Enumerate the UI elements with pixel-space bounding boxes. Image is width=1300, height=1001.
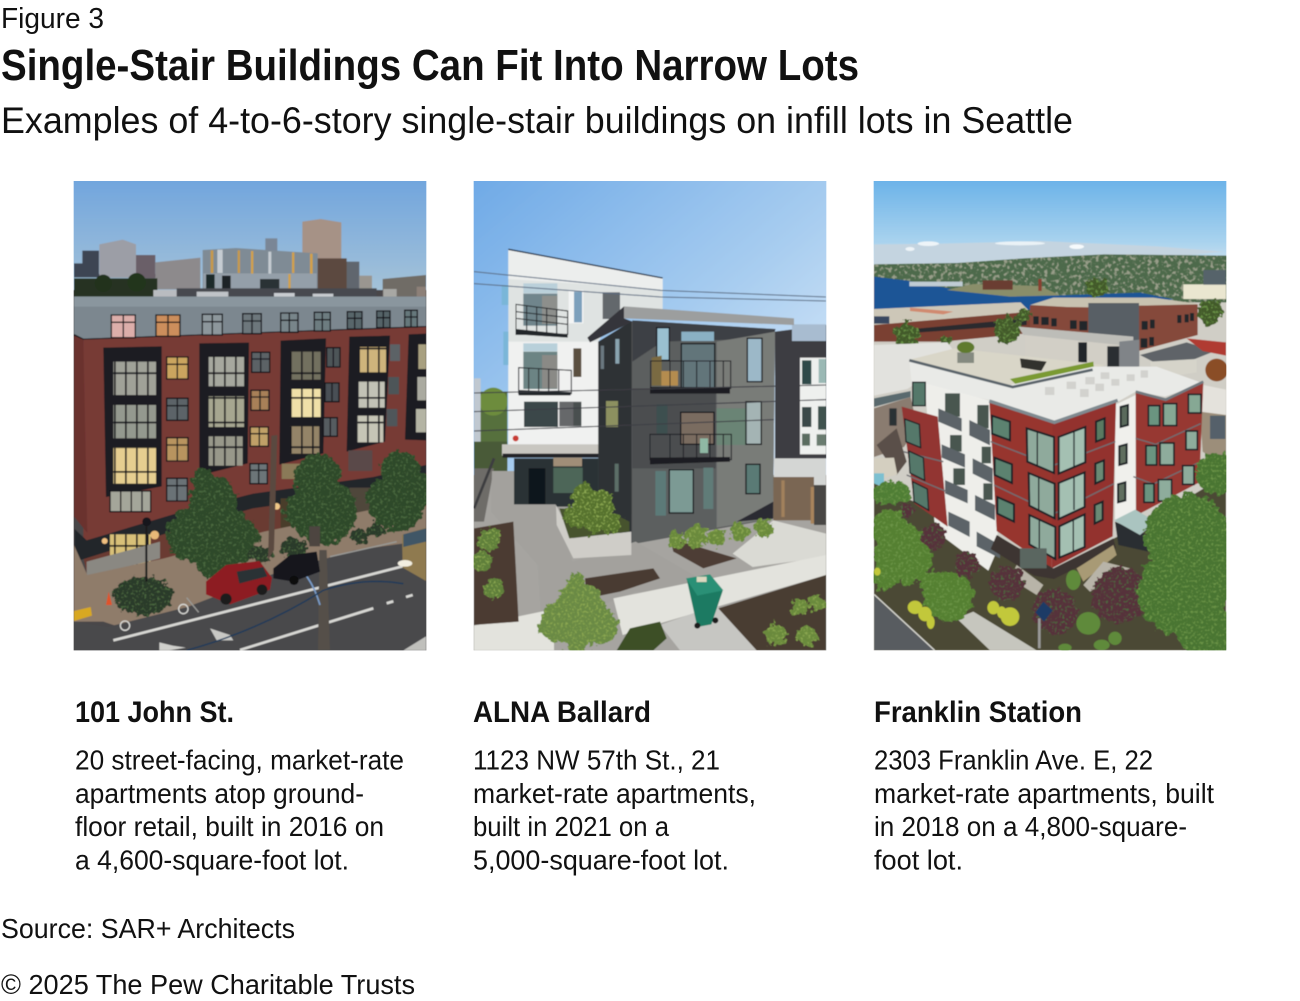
large tree — [1138, 453, 1247, 660]
stair wing with balconies — [925, 383, 1136, 571]
roof units — [1045, 370, 1148, 397]
entry canopy and lobby — [502, 444, 603, 507]
red walls — [902, 382, 1203, 568]
low brick building left — [874, 302, 1031, 342]
metal roof storey — [74, 297, 426, 340]
caption body: 20 street-facing, market-rate — [75, 744, 404, 776]
main windows left face — [992, 416, 1055, 559]
brick wall windows — [110, 344, 400, 512]
planter foliage — [565, 482, 621, 535]
caption heading: 101 John St. — [75, 696, 234, 729]
right bed plants — [668, 519, 825, 646]
left wing windows — [905, 382, 929, 510]
copyright: © 2025 The Pew Charitable Trusts — [1, 969, 415, 1000]
caption: ALNA Ballard — [473, 696, 756, 876]
caption body: apartments atop ground- — [75, 778, 364, 809]
caption body: foot lot. — [874, 844, 963, 876]
main roof — [909, 360, 1203, 423]
left hedge — [869, 481, 911, 505]
caption body: 5,000-square-foot lot. — [473, 844, 729, 876]
yellow shrubs — [874, 568, 1019, 629]
caption body: 1123 NW 57th St., 21 — [473, 744, 720, 776]
rooftop deck — [908, 342, 1105, 386]
sidewalk — [74, 498, 426, 632]
caption heading: ALNA Ballard — [473, 696, 651, 729]
ground paving — [474, 468, 826, 650]
caption body: 2303 Franklin Ave. E, 22 — [874, 744, 1153, 776]
caption heading: Franklin Station — [874, 696, 1082, 729]
distant white building — [1183, 270, 1226, 299]
trees behind — [894, 278, 1223, 348]
caption body: a 4,600-square-foot lot. — [75, 844, 349, 876]
photo: Franklin Station aerial view — [874, 181, 1226, 650]
clouds — [874, 241, 1224, 265]
purple shrubs — [900, 503, 1148, 634]
caption body: market-rate apartments, — [473, 778, 756, 809]
subtitle: Examples of 4-to-6-story single-stair buildings on infill lots in Seattle — [1, 100, 1073, 141]
caption body: floor retail, built in 2016 on — [75, 811, 384, 842]
dark building — [598, 320, 776, 544]
caption body — [473, 744, 756, 876]
dark car — [273, 552, 320, 585]
caption body: market-rate apartments, built — [874, 778, 1214, 809]
rooftop penthouse — [153, 248, 426, 298]
right garden beds — [585, 538, 826, 650]
solar panel — [1035, 602, 1053, 648]
caption: 101 John St. — [75, 696, 404, 876]
right wing windows — [1144, 394, 1201, 502]
caption: Franklin Station — [874, 696, 1214, 876]
foreground tree — [539, 573, 618, 653]
photo: 101 John St. building at dusk — [74, 181, 426, 650]
left garden bed — [474, 458, 519, 625]
source note: Source: SAR+ Architects — [1, 913, 295, 944]
traffic cone — [106, 592, 112, 605]
caption body: in 2018 on a 4,800-square- — [874, 811, 1187, 842]
wood fence — [773, 477, 826, 525]
green shrubs — [1058, 570, 1122, 652]
left bed plants — [471, 529, 503, 598]
dark building balconies — [650, 356, 731, 464]
skyline — [74, 219, 426, 298]
caption body — [75, 744, 404, 876]
raised planter — [556, 505, 631, 558]
photo: ALNA Ballard building in daylight — [474, 181, 826, 650]
neighbor roofs and houses — [874, 338, 1228, 485]
street trees — [167, 450, 435, 580]
dark shrub — [617, 622, 667, 650]
tower balconies — [516, 304, 571, 395]
left trees — [871, 510, 974, 622]
left neighbor and tree — [474, 378, 507, 472]
base and glass canopy — [991, 510, 1156, 582]
white tower — [502, 249, 663, 446]
landscaping ground — [874, 475, 1226, 650]
main windows right face — [1059, 405, 1128, 558]
dark bay windows — [103, 334, 426, 497]
rooftop penthouse — [1018, 303, 1139, 373]
caption body — [874, 744, 1214, 876]
bus — [398, 528, 426, 581]
right neighbor — [774, 324, 827, 485]
road and walk — [874, 562, 1130, 650]
ground floor storefront — [74, 464, 426, 576]
roof eave — [587, 306, 794, 342]
red car — [206, 561, 272, 605]
brick wall — [74, 327, 426, 550]
figure label: Figure 3 — [1, 3, 104, 35]
title: Single-Stair Buildings Can Fit Into Narrow Lots — [1, 41, 859, 90]
overhead wires — [474, 272, 826, 431]
green bin — [686, 574, 723, 629]
lake — [874, 277, 1174, 315]
street — [74, 540, 426, 657]
dark building windows — [601, 328, 762, 516]
brick mid building — [1030, 297, 1198, 351]
lamp post — [142, 517, 151, 582]
utility poles and wires — [187, 435, 403, 650]
top floor windows — [111, 310, 417, 338]
shrubs — [114, 524, 384, 615]
caption body: built in 2021 on a — [473, 811, 669, 842]
far hillside city — [874, 254, 1229, 302]
